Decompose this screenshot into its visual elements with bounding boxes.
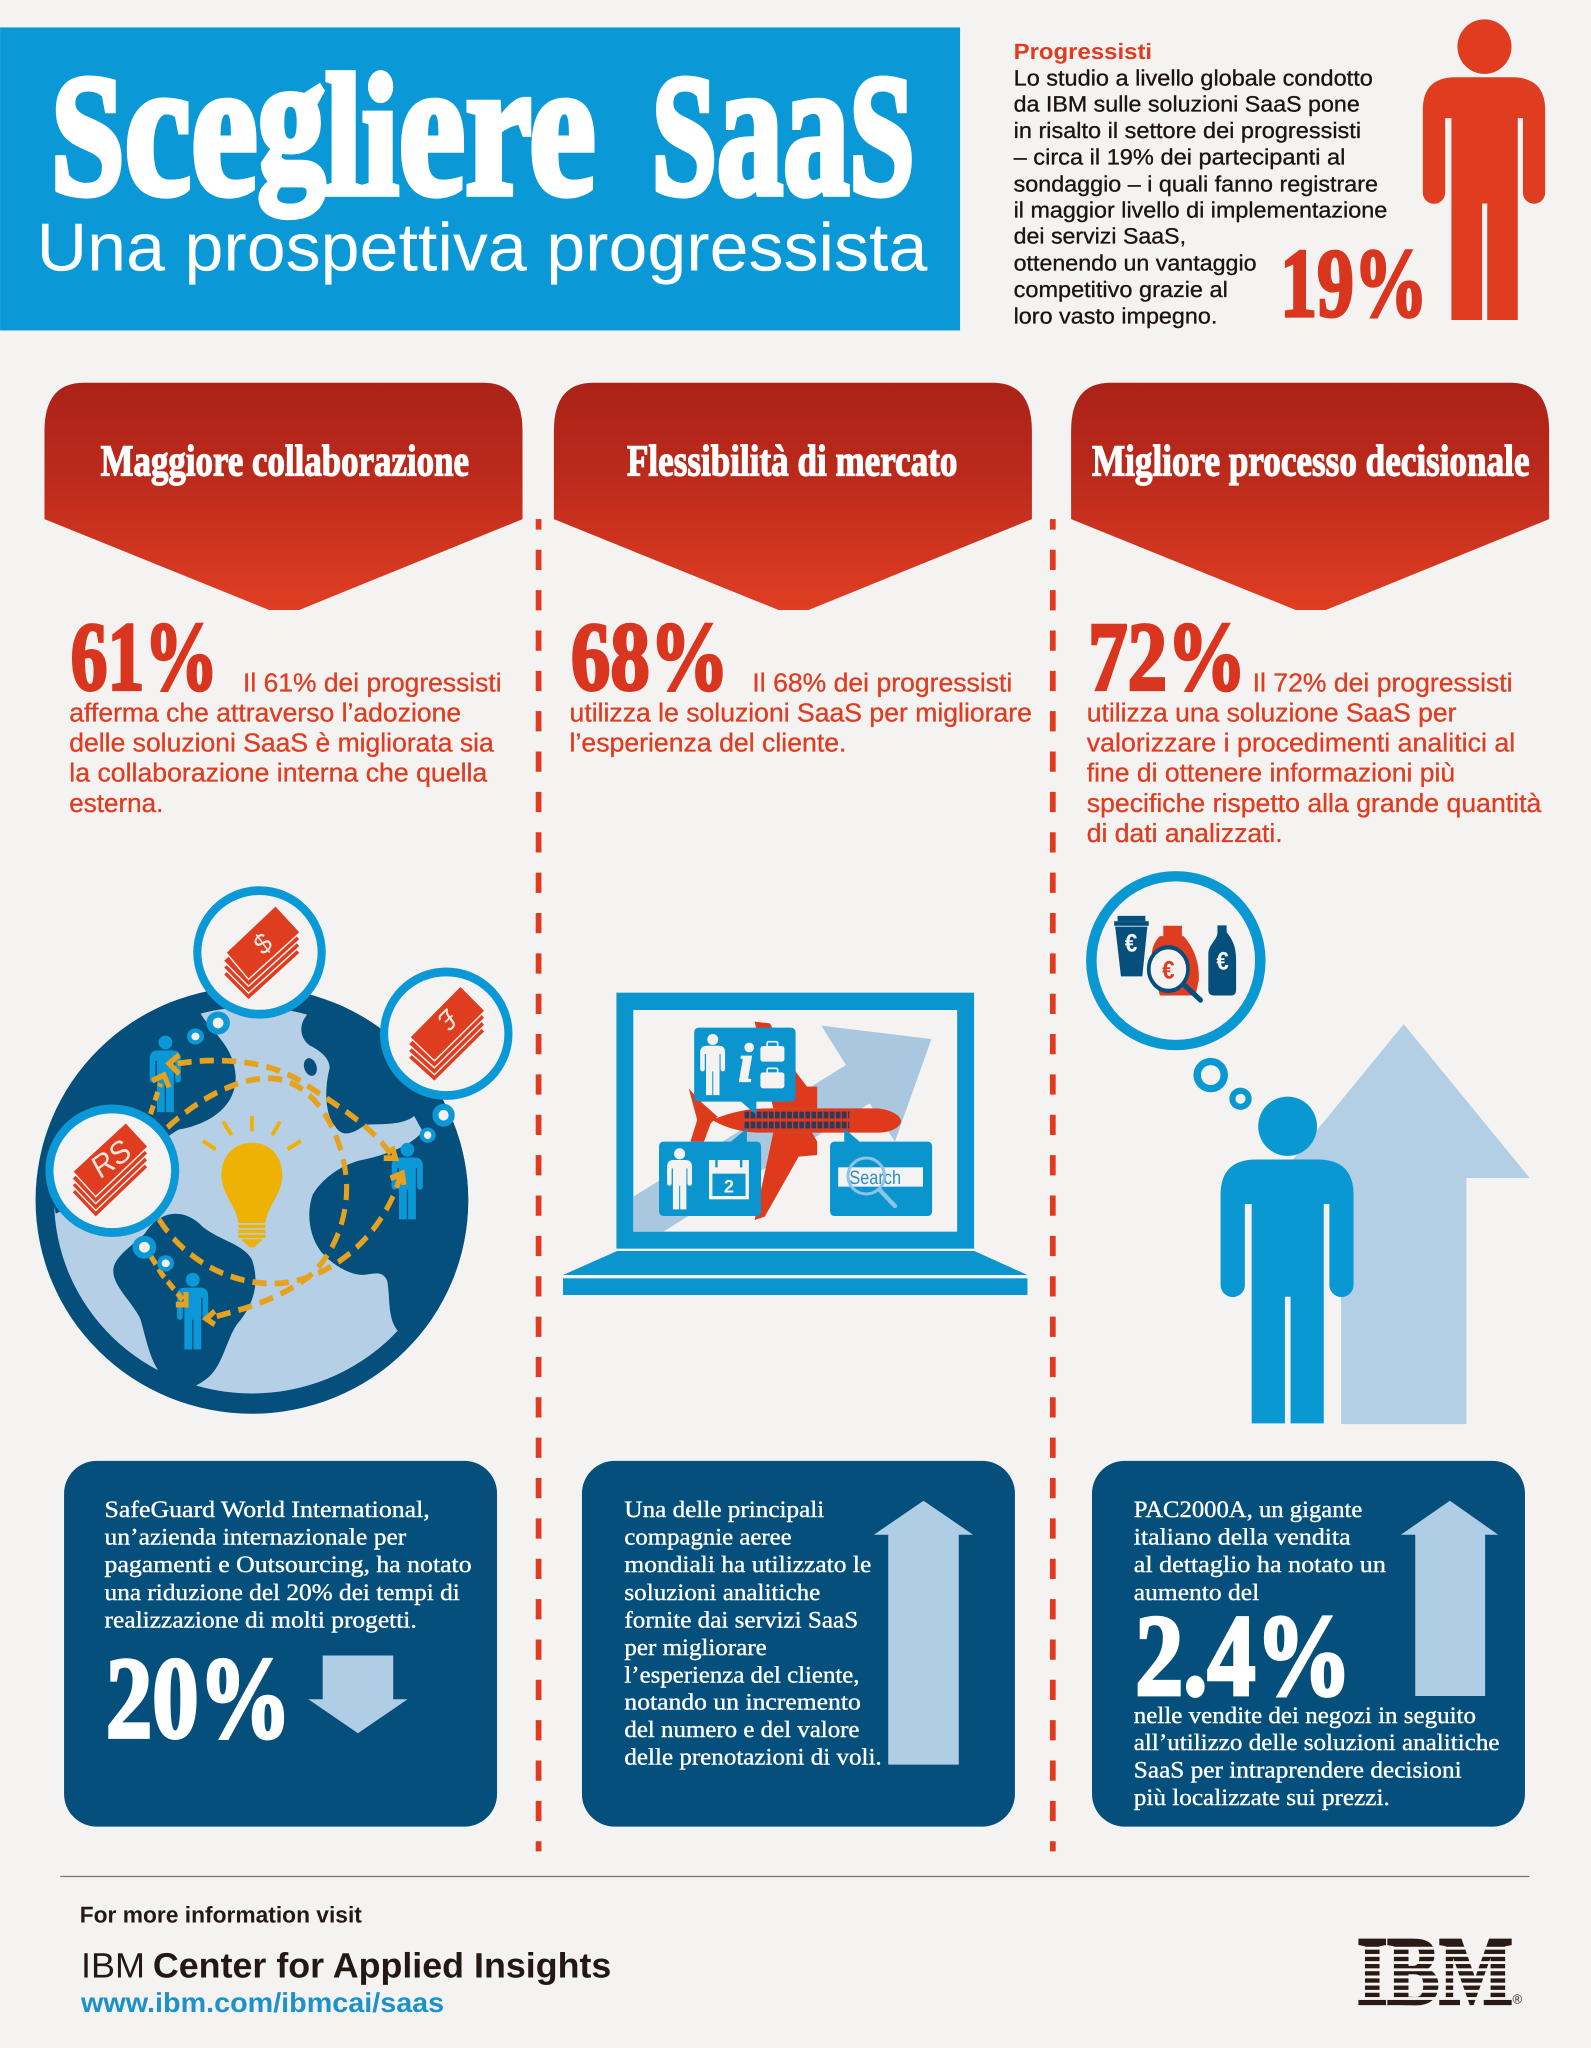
title: ere <box>399 20 596 236</box>
footer text: For more information visit <box>80 1902 362 1928</box>
title: g <box>258 22 325 217</box>
column 3 statistic text: valorizzare i procedimenti analitici al <box>1087 729 1515 758</box>
big arrow <box>1278 1024 1530 1424</box>
column header: Migliore processo decisionale <box>1071 383 1549 610</box>
bubble: pound money stack: £ <box>433 1002 462 1038</box>
stat: 2.4%: 2.4% <box>1135 1593 1352 1721</box>
column 2 statistic text: l’esperienza del cliente. <box>570 729 846 758</box>
growth arrow <box>633 1026 931 1232</box>
footer text: www.ibm.com/ibmcai/saas <box>80 1989 444 2019</box>
case study panel: airline: delle prenotazioni di voli. <box>624 1744 882 1770</box>
stat: 19%: 19% <box>1280 230 1428 338</box>
column 2 statistic text: 68% <box>571 603 729 712</box>
arrow up <box>874 1501 973 1765</box>
icon: bottle <box>1208 925 1236 995</box>
illustration: globe with people and currency bubbles <box>34 886 513 1414</box>
column 1 statistic text: la collaborazione interna che quella <box>69 760 488 788</box>
icon: light bulb <box>203 1116 301 1247</box>
column 3 statistic text: fine di ottenere informazioni più <box>1087 760 1455 788</box>
info card: person and luggage <box>694 1028 796 1115</box>
bubble: real money stack: RS <box>86 1131 136 1186</box>
subtitle: Una prospettiva progressista <box>37 210 928 286</box>
search card: Search <box>849 1167 901 1188</box>
search card <box>830 1128 932 1216</box>
arrow down <box>308 1656 408 1733</box>
column header: Maggiore collaborazione <box>44 383 523 610</box>
icon: bottle: € <box>1216 946 1229 975</box>
case study panel: SafeGuard: una riduzione del 20% dei tempi di <box>105 1579 460 1605</box>
intro text: progressisti: in risalto il settore dei progressisti <box>1014 118 1361 143</box>
case study panel: airline: Una delle principali <box>624 1496 824 1522</box>
case study panel: PAC2000A: italiano della vendita <box>1134 1524 1351 1550</box>
column 1 statistic text: delle soluzioni SaaS è migliorata sia <box>69 729 495 758</box>
column 2 statistic text: Il 68% dei progressisti <box>752 669 1012 698</box>
IBM logo: IBM <box>1357 1919 1513 2026</box>
column 3 statistic text: specifiche rispetto alla grande quantità <box>1087 790 1542 818</box>
thought bubble <box>1086 871 1266 1110</box>
case study panel: SafeGuard <box>64 1461 497 1827</box>
people on globe <box>150 1036 423 1349</box>
case study panel: airline: del numero e del valore <box>624 1716 860 1742</box>
case study panel: SafeGuard: pagamenti e Outsourcing, ha notato <box>105 1551 472 1577</box>
bubble: dollar money stack: $ <box>248 926 278 961</box>
icon: cup <box>1114 916 1149 976</box>
intro text: progressisti: Lo studio a livello globale condotto <box>1014 66 1373 91</box>
column 1 statistic text: afferma che attraverso l’adozione <box>69 699 461 728</box>
intro text: progressisti <box>1014 39 1387 328</box>
calendar card <box>659 1128 761 1216</box>
icon: red person <box>1423 19 1545 320</box>
case study panel: airline: notando un incremento <box>624 1689 861 1715</box>
intro text: progressisti: – circa il 19% dei partecipanti al <box>1014 145 1345 170</box>
arrow up <box>1401 1501 1498 1696</box>
intro text: progressisti: competitivo grazie al <box>1014 278 1228 302</box>
case study panel: PAC2000A: al dettaglio ha notato un <box>1134 1551 1386 1577</box>
IBM logo: ® <box>1513 1993 1523 2008</box>
column 3 statistic text: 72% <box>1088 603 1246 712</box>
footer text <box>80 1902 611 2019</box>
column header: Maggiore collaborazione: Maggiore collaborazione <box>101 438 469 486</box>
title: li <box>325 39 399 231</box>
bubble: pound money stack <box>380 968 513 1100</box>
case study panel: airline: l’esperienza del cliente, <box>624 1661 859 1688</box>
column 2 statistic text: utilizza le soluzioni SaaS per migliorare <box>570 699 1032 728</box>
intro text: progressisti: ottenendo un vantaggio <box>1014 251 1257 276</box>
title banner <box>0 20 960 330</box>
blue person <box>1221 1097 1354 1423</box>
case study panel: PAC2000A: all’utilizzo delle soluzioni analitiche <box>1134 1729 1500 1755</box>
intro text: progressisti: Progressisti <box>1014 39 1152 64</box>
column 3 statistic text <box>1087 603 1542 848</box>
footer text: IBM <box>81 1946 145 1985</box>
footer text: Center for Applied Insights <box>153 1946 611 1985</box>
case study panel: PAC2000A: aumento del <box>1134 1579 1259 1605</box>
calendar card: 2 <box>724 1177 734 1197</box>
title: SaaS <box>652 20 914 236</box>
intro text: progressisti: il maggior livello di implementazione <box>1014 198 1387 223</box>
column 1 statistic text: Il 61% dei progressisti <box>243 669 502 698</box>
small thought bubbles <box>133 1012 455 1271</box>
column 1 statistic text: esterna. <box>69 790 163 818</box>
case study panel: PAC2000A: nelle vendite dei negozi in seguito <box>1134 1702 1476 1728</box>
airplane <box>689 1022 901 1220</box>
intro text: progressisti: dei servizi SaaS, <box>1014 224 1186 249</box>
column 1 statistic text <box>69 603 502 818</box>
intro text: progressisti: loro vasto impegno. <box>1014 304 1217 328</box>
column 3 statistic text: di dati analizzati. <box>1087 820 1283 848</box>
case study panel: PAC2000A: SaaS per intraprendere decisioni <box>1134 1757 1462 1783</box>
case study panel: airline <box>582 1461 1015 1827</box>
case study panel: SafeGuard: un’azienda internazionale per <box>105 1524 406 1550</box>
case study panel: PAC2000A: PAC2000A, un gigante <box>1134 1496 1362 1522</box>
case study panel: SafeGuard: SafeGuard World International, <box>105 1496 430 1522</box>
info card: person and luggage: i <box>738 1033 754 1094</box>
case study panel: airline: per migliorare <box>624 1634 767 1660</box>
bubble: real money stack <box>45 1105 179 1237</box>
icon: detergent with magnifier <box>1149 926 1201 1000</box>
column 1 statistic text: 61% <box>71 603 218 712</box>
intro text: progressisti: sondaggio – i quali fanno registrare <box>1014 172 1378 197</box>
column 2 statistic text <box>570 603 1032 758</box>
stat: 20%: 20% <box>106 1635 291 1763</box>
column header: Flessibilità di mercato: Flessibilità di mercato <box>627 438 957 486</box>
icon: detergent with magnifier: € <box>1162 956 1175 984</box>
case study panel: PAC2000A: più localizzate sui prezzi. <box>1134 1784 1390 1810</box>
intro text: progressisti: da IBM sulle soluzioni SaaS pone <box>1014 92 1360 117</box>
illustration: person, thought bubble and growth arrow <box>1086 871 1530 1424</box>
column header: Flessibilità di mercato <box>554 383 1032 610</box>
column 3 statistic text: utilizza una soluzione SaaS per <box>1087 699 1457 728</box>
column 3 statistic text: Il 72% dei progressisti <box>1253 669 1513 698</box>
case study panel: SafeGuard: realizzazione di molti progetti. <box>105 1607 417 1633</box>
icon: cup: € <box>1125 928 1137 957</box>
dashed orange arrows <box>150 1055 404 1325</box>
case study panel: airline: fornite dai servizi SaaS <box>624 1607 858 1633</box>
case study panel: airline: mondiali ha utilizzato le <box>624 1551 871 1577</box>
bubble: dollar money stack <box>193 886 326 1019</box>
case study panel: airline: compagnie aeree <box>624 1524 792 1550</box>
title: Sce <box>51 20 298 236</box>
case study panel: PAC2000A <box>1092 1461 1525 1827</box>
title <box>51 20 914 236</box>
case study panel: airline: soluzioni analitiche <box>624 1579 820 1605</box>
illustration: laptop with airplane <box>563 993 1027 1295</box>
